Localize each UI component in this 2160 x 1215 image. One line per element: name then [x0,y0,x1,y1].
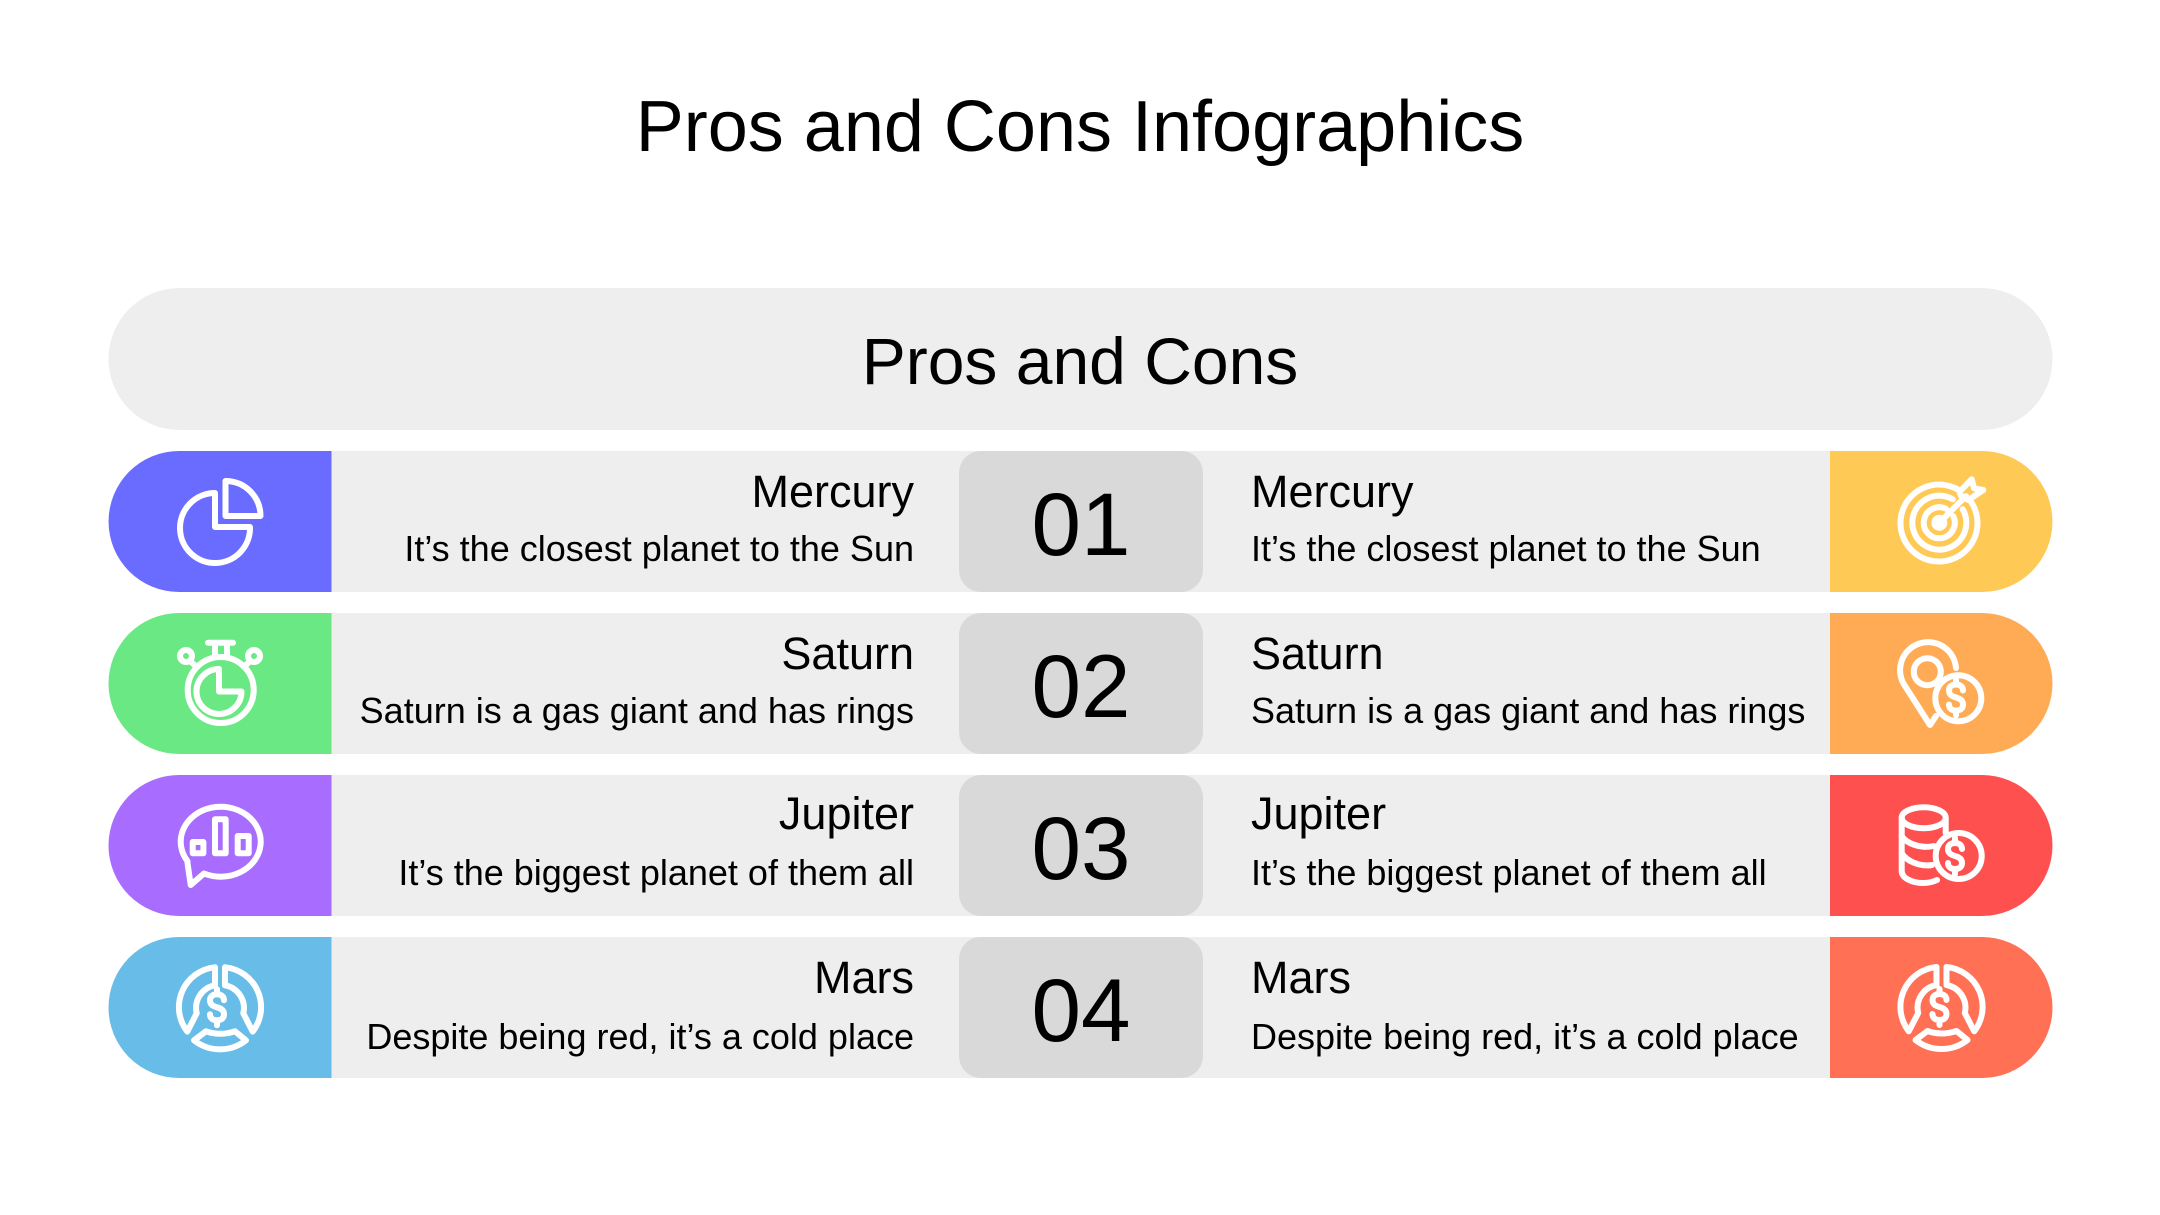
panel: header pill [108,288,2052,430]
right text: Mercury: Mercury [1251,466,1414,517]
icon: pie chart [180,481,260,563]
right text: Jupiter: It’s the biggest planet of them all [1251,852,1767,893]
right colour cap: orange [1830,613,2052,754]
panel: row 02 [108,613,2052,754]
right text: Jupiter [1251,788,1767,893]
left text: Mercury: Mercury [751,466,914,517]
number box 04: 04 [1032,960,1130,1060]
title: Pros and Cons Infographics [636,87,1524,167]
left colour cap: green [108,613,331,754]
panel: row 04 [108,937,2052,1078]
icon: dollar donut chart [179,967,261,1049]
right colour cap: coral [1830,937,2052,1078]
icon: coin stack [1902,807,1982,883]
left colour cap: purple [108,775,331,916]
number box 02: 02 [1032,636,1130,736]
right text: Mercury [1251,466,1761,569]
left text: Jupiter: It’s the biggest planet of them all [398,852,914,893]
right text: Mars [1251,952,1799,1057]
right text: Saturn: Saturn [1251,628,1384,679]
left text: Saturn [360,628,914,731]
panel: row 03 [108,775,2052,916]
number box 01: 01 [1032,474,1130,574]
left text: Saturn: Saturn is a gas giant and has rings [360,690,914,731]
icon: dollar donut chart right [1900,967,1983,1049]
left text: Jupiter: Jupiter [779,788,914,839]
icon: location pin with coin [1900,642,1981,725]
left text: Mercury: It’s the closest planet to the Sun [404,528,914,569]
right text: Mars: Despite being red, it’s a cold place [1251,1016,1799,1057]
left text: Jupiter [398,788,914,893]
icon: stopwatch [180,643,260,723]
left text: Saturn: Saturn [781,628,914,679]
right text: Jupiter: Jupiter [1251,788,1386,839]
number box 02 [959,613,1203,754]
right text: Saturn: Saturn is a gas giant and has rings [1251,690,1805,731]
icon: target [1900,479,1983,562]
right text: Mars: Mars [1251,952,1351,1003]
icon: speech bubble with bars [181,807,261,885]
right text: Mercury: It’s the closest planet to the Sun [1251,528,1761,569]
number box 03 [959,775,1203,916]
heading: Pros and Cons [862,324,1298,398]
left colour cap: blue [109,451,331,592]
left text: Mars [366,952,914,1057]
left colour cap: sky blue [108,937,331,1078]
right colour cap: red [1830,775,2052,916]
left text: Mars: Despite being red, it’s a cold place [366,1016,914,1057]
left text: Mars: Mars [814,952,914,1003]
number box 01 [959,451,1203,592]
right text: Saturn [1251,628,1805,731]
left text: Mercury [404,466,914,569]
panel: row 01 [109,451,2052,592]
right colour cap: yellow [1830,451,2052,592]
number box 04 [959,937,1203,1078]
number box 03: 03 [1032,798,1130,898]
